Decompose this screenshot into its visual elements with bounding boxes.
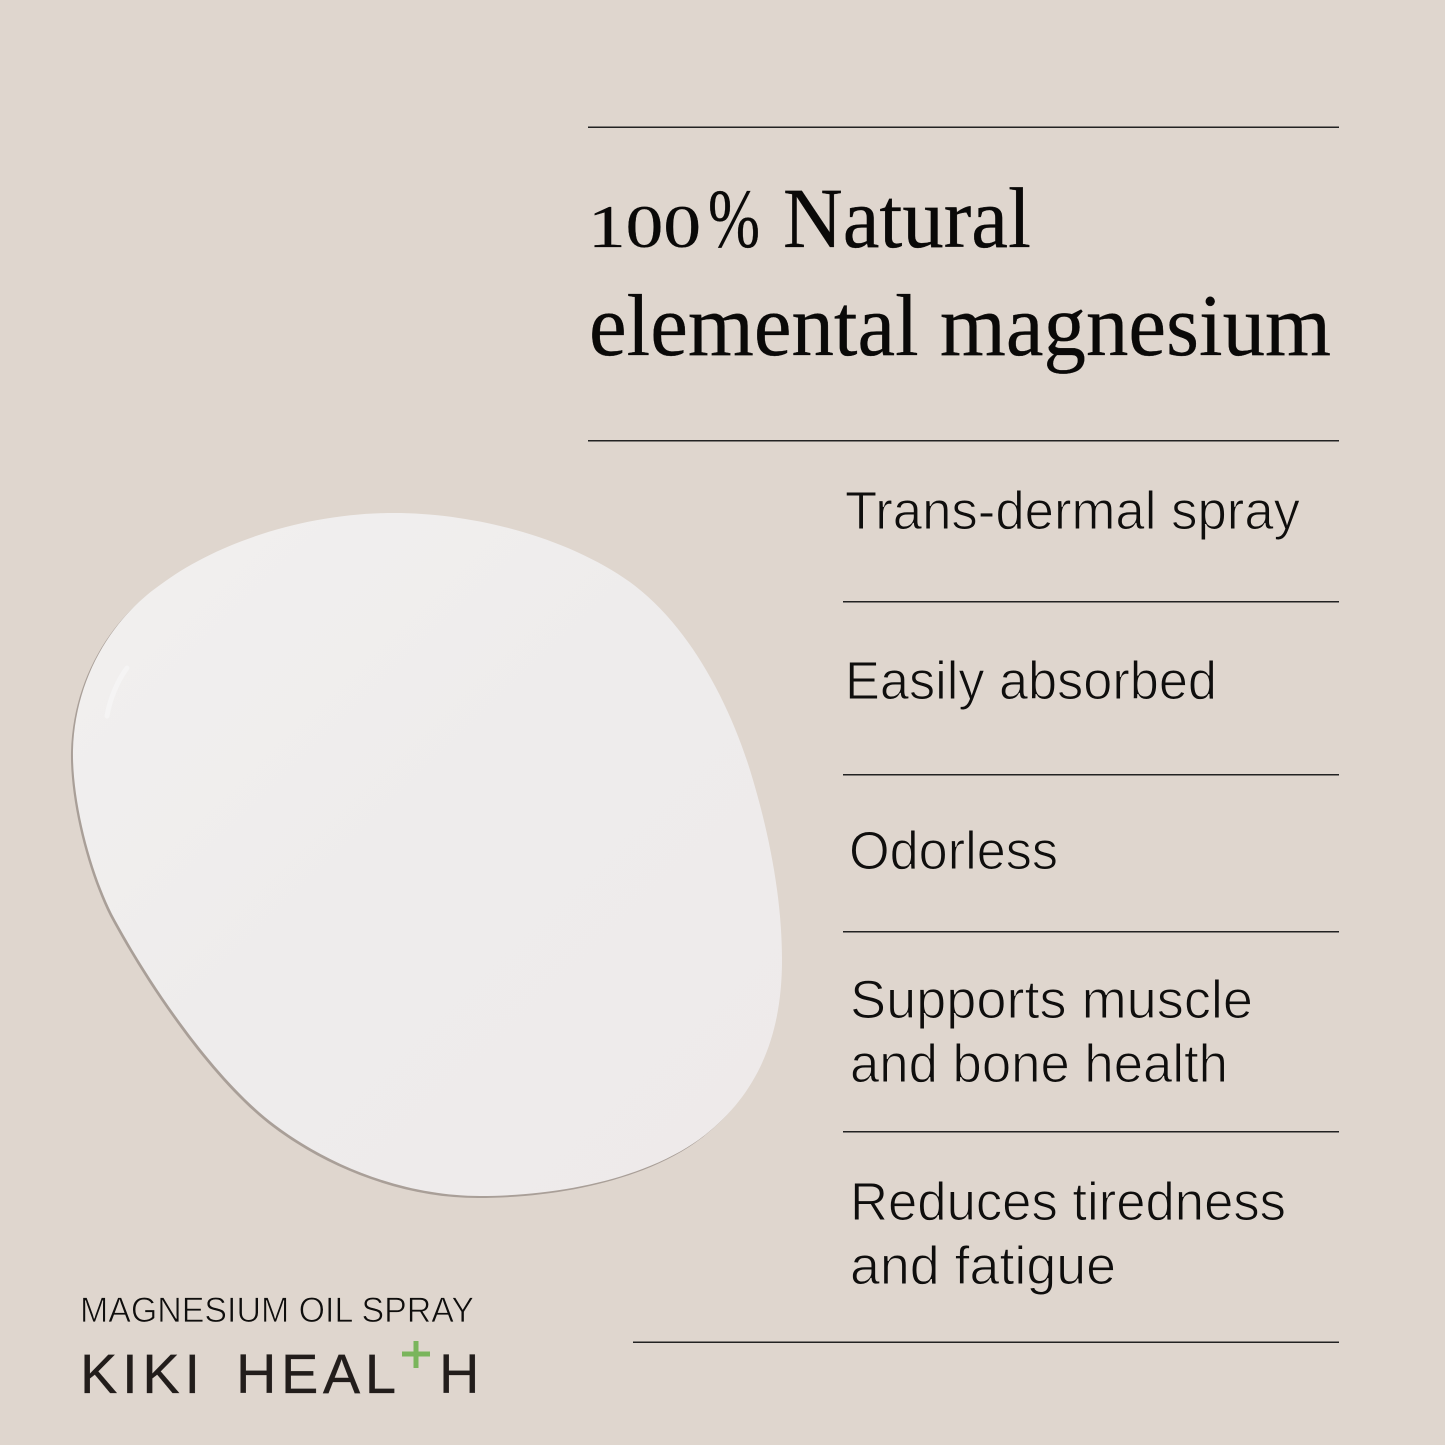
benefit: odorless: Odorless <box>849 821 1058 881</box>
brand logo: HEAL <box>236 1342 396 1405</box>
heading: elemental magnesium <box>589 278 1331 375</box>
benefit: reduces tiredness and fatigue <box>850 1172 1286 1296</box>
brand logo: H <box>439 1342 479 1405</box>
icon: green plus <box>402 1341 430 1368</box>
heading <box>588 170 1331 375</box>
benefit: trans-dermal spray: Trans-dermal spray <box>845 481 1300 541</box>
brand logo <box>80 1341 479 1405</box>
benefit: supports muscle and bone health: Supports muscle <box>850 970 1253 1030</box>
heading: 100 <box>588 194 701 260</box>
heading: % <box>708 173 760 266</box>
benefit: reduces tiredness and fatigue: Reduces tiredness <box>850 1172 1286 1232</box>
brand logo: KIKI <box>80 1342 200 1405</box>
benefit: easily absorbed: Easily absorbed <box>845 651 1217 711</box>
lotion blob <box>71 513 782 1198</box>
benefit: supports muscle and bone health: and bone health <box>850 1034 1228 1094</box>
heading: Natural <box>783 170 1031 266</box>
benefit: supports muscle and bone health <box>850 970 1253 1094</box>
benefit: reduces tiredness and fatigue: and fatigue <box>850 1236 1116 1296</box>
product name: MAGNESIUM OIL SPRAY <box>80 1290 474 1330</box>
